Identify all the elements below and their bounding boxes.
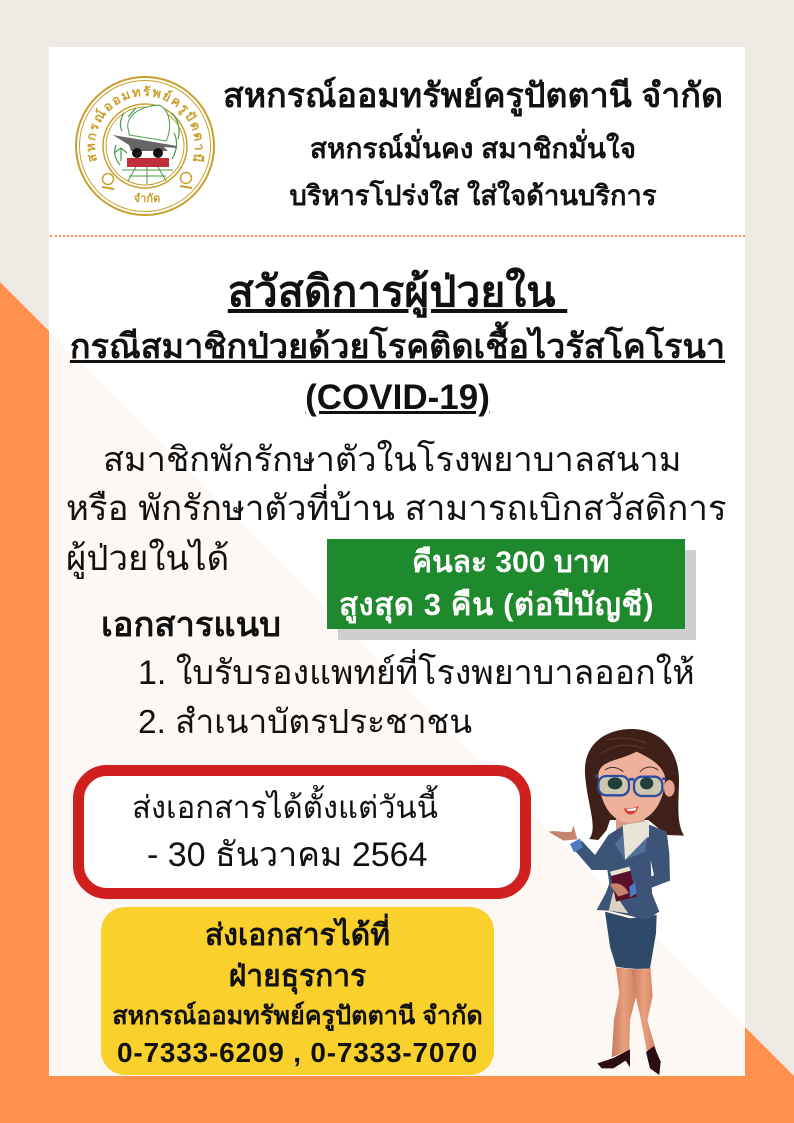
body paragraph [66, 440, 727, 579]
body paragraph: หรือ พักรักษาตัวที่บ้าน สามารถเบิกสวัสดิการ [66, 489, 727, 528]
subtitle: กรณีสมาชิกป่วยด้วยโรคติดเชื้อไวรัสโคโรนา [70, 328, 725, 366]
body paragraph: ผู้ป่วยในได้ [66, 539, 229, 578]
subtitle: covid: (COVID-19) [305, 378, 490, 417]
list: documents: 1. ใบรับรองแพทย์ที่โรงพยาบาลออกให้ [138, 654, 695, 692]
heading: attachments: เอกสารแนบ [101, 606, 281, 644]
panel: where to send [101, 907, 494, 1075]
panel: where to send: ฝ่ายธุรการ [229, 960, 366, 993]
header: slogan line 2: บริหารโปร่งใส ใส่ใจด้านบริการ [289, 180, 657, 211]
icon: cooperative seal logo [75, 76, 215, 216]
body paragraph: สมาชิกพักรักษาตัวในโรงพยาบาลสนาม [103, 441, 681, 479]
panel: where to send: ส่งเอกสารได้ที่ [205, 919, 390, 952]
icon: businesswoman presenting [548, 729, 684, 1075]
header: slogan line 1: สหกรณ์มั่นคง สมาชิกมั่นใจ [310, 133, 636, 164]
icon: cooperative seal logo: สหกรณ์ออมทรัพย์ครูปัตตานี [87, 85, 204, 162]
panel: where to send: 0-7333-6209 , 0-7333-7070 [117, 1037, 478, 1068]
dotted divider [50, 235, 745, 237]
callout: submission dates: - 30 ธันวาคม 2564 [147, 836, 427, 874]
list: documents: 2. สำเนาบัตรประชาชน [138, 704, 472, 741]
icon: cooperative seal logo: จำกัด [134, 192, 160, 205]
callout: submission dates [73, 765, 531, 899]
title: สวัสดิการผู้ป่วยใน [228, 268, 555, 316]
list: documents [138, 649, 695, 741]
callout: submission dates: ส่งเอกสารได้ตั้งแต่วันนี้ [132, 790, 438, 825]
callout: green amount box [327, 539, 685, 629]
panel: where to send: สหกรณ์ออมทรัพย์ครูปัตตานี จำกัด [112, 1002, 483, 1030]
callout: green amount box: สูงสุด 3 คืน (ต่อปีบัญชี) [339, 587, 654, 622]
callout: green amount box: คืนละ 300 บาท [412, 546, 609, 579]
header: cooperative name: สหกรณ์ออมทรัพย์ครูปัตตานี จำกัด [223, 77, 723, 115]
